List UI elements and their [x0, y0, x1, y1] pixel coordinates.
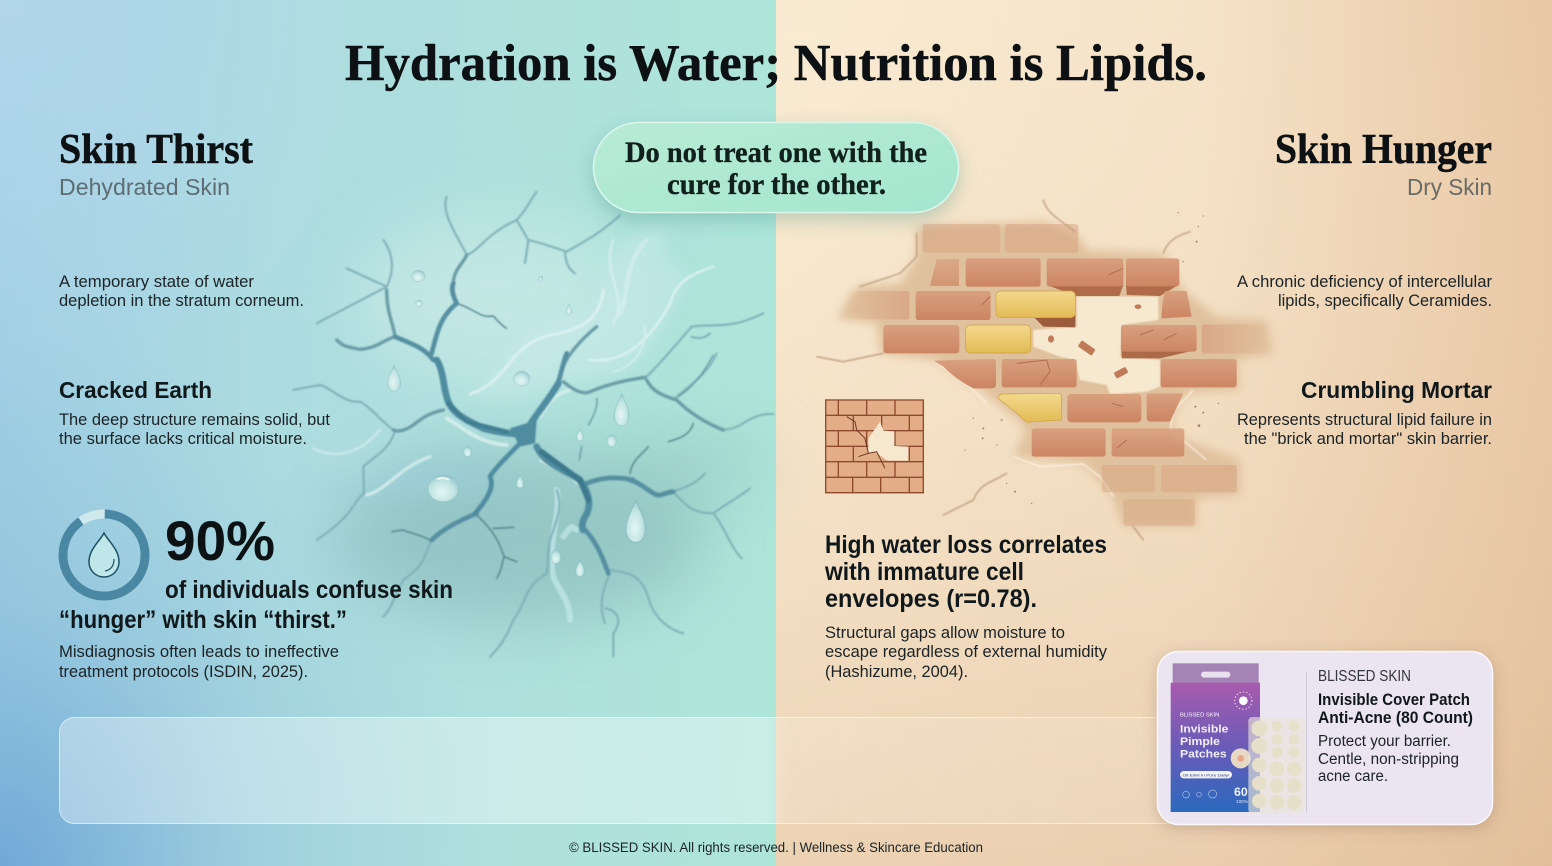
text: thirst definition	[59, 272, 304, 310]
stat: water loss correlation: Structural gaps allow moisture to	[825, 623, 1065, 642]
product image: patch box: Oil Elixir in Pore Daily!	[1183, 772, 1229, 777]
stat: water loss correlation: High water loss correlates	[825, 531, 1107, 559]
trickle	[552, 490, 577, 620]
background: thirst side	[0, 0, 776, 866]
text: crumbling mortar	[1237, 377, 1492, 448]
stat: water loss correlation: with immature cell	[824, 558, 1024, 586]
title: Hydration is Water; Nutrition is Lipids.	[345, 35, 1207, 92]
text: crumbling mortar: the "brick and mortar" skin barrier.	[1244, 429, 1492, 448]
product image: patch box: 60	[1234, 785, 1248, 799]
text: thirst definition: depletion in the stratum corneum.	[59, 291, 304, 310]
product text: acne care.	[1318, 768, 1388, 785]
stat: water loss correlation	[824, 531, 1107, 681]
product text: Protect your barrier.	[1318, 733, 1451, 750]
product image: patch box: Pimple	[1180, 736, 1220, 748]
text: thirst definition: A temporary state of water	[59, 272, 254, 291]
heading: skin hunger: Skin Hunger	[1275, 127, 1492, 173]
callout pill: cure for the other.	[667, 168, 886, 201]
text: cracked earth: Cracked Earth	[59, 377, 212, 403]
water wisps	[300, 227, 700, 497]
heading: skin thirst: Dehydrated Skin	[59, 174, 230, 200]
stat: 90 percent: “hunger” with skin “thirst.”	[59, 606, 347, 634]
background: hunger side	[776, 0, 1552, 866]
stat: water loss correlation: escape regardless of external humidity	[825, 642, 1107, 661]
icon: 90% progress ring with water drop	[62, 513, 146, 597]
mortar backing	[837, 222, 1273, 527]
plaster edge highlights	[933, 360, 1207, 497]
heading: skin thirst: Skin Thirst	[59, 127, 253, 173]
hole	[1033, 297, 1160, 394]
crack lines	[293, 192, 773, 657]
callout pill: Do not treat one with the	[625, 136, 927, 169]
stat: 90 percent	[59, 509, 453, 681]
stat: 90 percent: of individuals confuse skin	[165, 576, 453, 604]
dust	[964, 212, 1219, 504]
illustration: crumbling brick wall	[817, 200, 1273, 540]
product text: Centle, non-stripping	[1318, 751, 1459, 768]
bricks	[843, 224, 1268, 526]
stat: 90 percent: Misdiagnosis often leads to ineffective	[59, 642, 339, 661]
heading: skin hunger	[1275, 127, 1492, 200]
text: hunger definition: lipids, specifically Ceramides.	[1278, 291, 1492, 310]
text: crumbling mortar: Crumbling Mortar	[1301, 377, 1492, 403]
illustration: cracked earth with water	[293, 192, 773, 657]
water droplets	[387, 270, 645, 577]
product text: Invisible Cover Patch	[1318, 691, 1470, 709]
plaster cracks	[817, 200, 1190, 540]
product image: patch box: BLISSED SKIN	[1180, 712, 1219, 718]
stat: water loss correlation: (Hashizume, 2004).	[825, 662, 968, 681]
text: cracked earth: the surface lacks critical moisture.	[59, 429, 307, 448]
product text	[1318, 668, 1473, 785]
text: cracked earth	[59, 377, 330, 448]
product card	[1158, 652, 1492, 824]
product text: Anti-Acne (80 Count)	[1318, 709, 1473, 727]
product image: patch box: 100%	[1236, 799, 1248, 804]
heading: skin hunger: Dry Skin	[1407, 174, 1492, 200]
product image: patch box: Patches	[1180, 748, 1227, 760]
footer: © BLISSED SKIN. All rights reserved. | Wellness & Skincare Education	[569, 839, 983, 855]
product image: patch box: Invisible	[1180, 723, 1228, 735]
flying brick fragments	[1048, 304, 1141, 379]
text: hunger definition	[1237, 272, 1492, 310]
text: cracked earth: The deep structure remains solid, but	[59, 410, 330, 429]
text: hunger definition: A chronic deficiency of intercellular	[1237, 272, 1492, 291]
bottom glass panel	[60, 718, 1180, 824]
icon: small brick wall with hole	[825, 399, 924, 493]
text: crumbling mortar: Represents structural lipid failure in	[1237, 410, 1492, 429]
stat: 90 percent: 90%	[165, 509, 275, 572]
stat: water loss correlation: envelopes (r=0.78).	[825, 585, 1037, 613]
callout pill	[594, 122, 958, 212]
stat: 90 percent: treatment protocols (ISDIN, 2025).	[59, 662, 308, 681]
heading: skin thirst	[59, 127, 253, 200]
product text: BLISSED SKIN	[1318, 668, 1411, 685]
product image: patch box	[1171, 663, 1305, 814]
